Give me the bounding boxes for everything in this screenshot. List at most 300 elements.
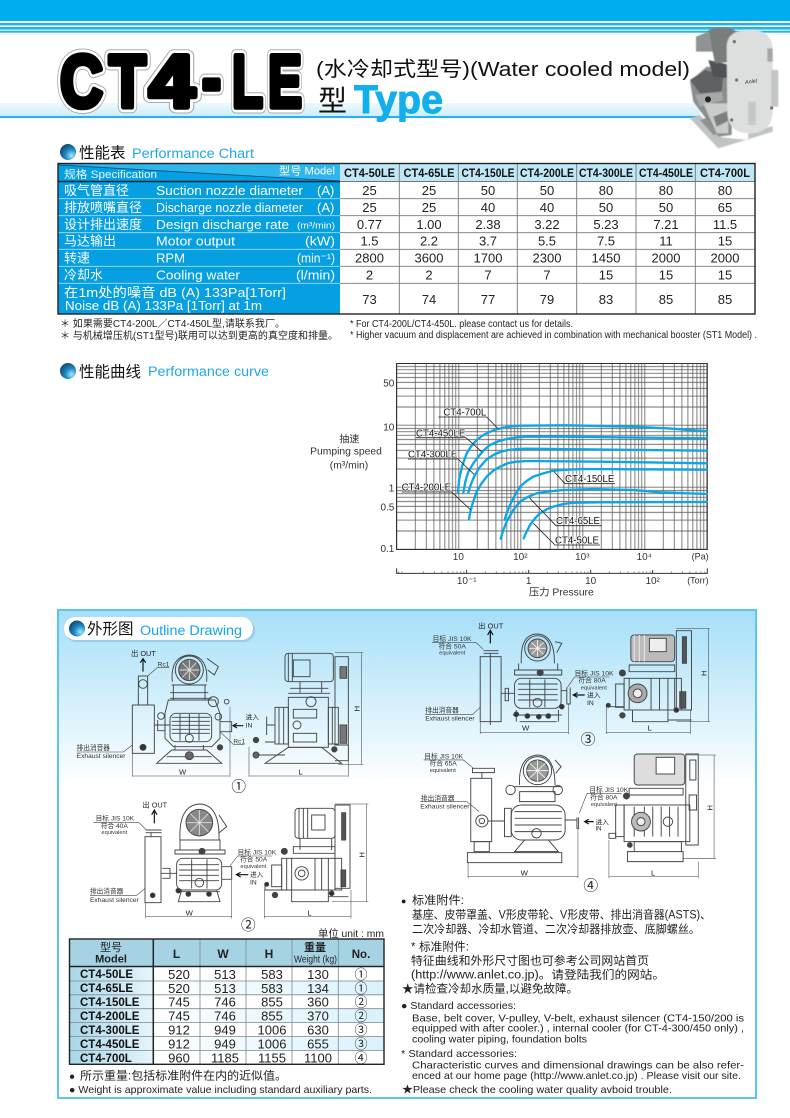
table values: 7 [543,267,551,282]
table grid [340,164,755,314]
table values: 2300 [533,250,561,265]
table header: W [217,947,229,961]
labels 1: H [352,706,361,711]
table values: 7 [484,267,492,282]
title: CT4-LE: E [268,40,302,123]
table rows: 855 [261,995,283,1010]
spec column: Design discharge rate [156,217,289,232]
table rows: CT4-50LE [80,969,133,981]
accessories notes: Chinese [401,893,711,996]
y axis labels: 50 [383,378,395,389]
title: CT4-LE: T [109,40,146,123]
heading: performance curve: Performance curve [148,364,269,379]
weight notes [69,1068,372,1096]
x axis: Torr: 10 [585,576,597,587]
labels 1: Rc1 [233,738,245,745]
labels 4: Exhaust silencer [420,804,470,811]
side view 3 [606,631,692,722]
table values: 2000 [711,250,739,265]
model header row: CT4-200LE [520,166,574,180]
table values: 15 [718,267,732,282]
table values: 73 [362,292,377,307]
x axis: Torr [397,568,709,598]
title: CT4-LE: E [268,40,302,123]
accessories notes: English: Characteristic curves and dimensional drawings can be also refer- [412,1060,744,1072]
model header row: CT4-450LE [639,166,693,180]
drawing 4 [420,752,716,894]
table rows: 1100 [304,1050,332,1065]
labels 2: 符合 50A [240,854,268,863]
table lines [70,939,384,1064]
table values: 3.22 [534,217,560,232]
spec column: 排放喷嘴直径 [64,200,142,215]
heading pill: outline drawing: 外形图 [87,620,134,638]
table rows: 630 [307,1022,329,1038]
heading: performance chart: 性能表 [79,144,126,162]
header stripes [0,0,790,118]
labels 3: L [648,724,653,733]
accessories notes: English: equipped with after cooler.) , internal cooler (for CT-4-300/450 only) , [412,1024,744,1035]
table rows: 520 [168,967,190,982]
table rows [80,967,368,1065]
spec column: (min⁻¹) [297,250,335,265]
labels 3: W [522,724,530,733]
spec column: Cooling water [156,267,241,282]
table rows: 1006 [258,1036,286,1051]
table header: L [173,947,180,961]
table rows: CT4-700L [80,1053,132,1065]
x axis labels: Pa: 10⁴ [637,552,652,563]
labels 4: W [521,868,529,877]
labels 2: Exhaust silencer [90,897,140,904]
labels 1: Rc1 [158,662,170,669]
accessories notes: English [401,1001,744,1096]
table values: 65 [718,200,732,215]
title: CT4-LE: T [109,40,146,123]
y axis labels: (m³/min) [330,460,368,471]
unit label: 单位 unit : mm [318,927,384,940]
y axis labels: 10 [383,422,395,433]
spec column: (A) [317,183,334,198]
x axis labels: Pa: 10 [453,552,464,563]
accessories notes: Chinese: 基座、皮带罩盖、V形皮带轮、V形皮带、排出消音器(ASTS)、 [412,908,711,922]
labels 2: W [186,908,194,917]
accessories notes: English: ★Please check the cooling water quality avboid trouble. [402,1085,672,1096]
spec column: RPM [156,250,185,265]
table values: 7.21 [653,217,679,232]
y axis labels: 抽速 [339,433,359,446]
dimension table [70,939,384,1065]
table values: 50 [599,200,613,215]
accessories notes: Chinese: 标准附件: [419,940,469,954]
spec column: Discharge nozzle diameter [156,200,304,215]
table values: 2800 [355,250,384,265]
spec column: 马达输出 [64,234,116,248]
labels 1: 进入 [246,714,259,722]
table values: 25 [362,183,377,198]
accessories notes: Chinese: ● [401,896,406,906]
arrows 2 [152,810,248,877]
model header row: CT4-300LE [579,166,633,180]
spec column: 转速 [64,250,90,265]
labels 2: H [357,852,366,858]
labels 3: Exhaust silencer [425,716,475,723]
table rows: 134 [307,981,329,996]
title: CT4-LE: - [202,37,221,120]
labels 4: H [706,805,715,811]
table rows: 360 [307,995,329,1010]
model header row: CT4-150LE [462,166,514,180]
table values: 85 [718,292,732,307]
spec column: 在1m处的噪音 dB (A) 133Pa[1Torr] [64,285,286,300]
title: CT4-LE: L [232,40,263,123]
labels 2: 目标 JIS 10K [238,847,277,856]
spec column: 冷却水 [64,267,103,282]
labels 2: 排出消音器 [90,887,124,896]
labels 4: equivalent [430,768,456,774]
curve labels: CT4-150LE [565,474,615,485]
title: CT4-LE [60,37,302,123]
table rows: 1185 [211,1050,239,1065]
accessories notes: English: * Standard accessories: [401,1049,517,1060]
heading: performance chart [60,144,254,162]
x axis: Torr: 10² [645,576,661,587]
title: CT4-LE: C [60,40,103,123]
curve labels: CT4-300LE [408,450,458,461]
labels 1: ① [231,779,246,796]
table values: 2000 [652,250,680,265]
table values: 15 [659,267,673,282]
table values [355,183,739,307]
heading: performance chart: Performance Chart [132,146,254,161]
table values: 79 [540,292,554,307]
title: CT4-LE: 4 [149,40,195,123]
table values: 77 [481,292,495,307]
accessories notes: Chinese: (http://www.anlet.co.jp)。请登陆我们的网站。 [411,968,665,982]
table values: 50 [540,183,554,198]
y axis labels [310,378,395,555]
table values: 80 [718,183,732,198]
table values: 2 [425,267,433,282]
curve labels: CT4-200LE [402,482,452,493]
table values: 25 [422,183,436,198]
labels 3: equivalent [581,685,607,691]
table rows: 949 [214,1022,236,1038]
labels 2: 目标 JIS 10K [96,814,135,823]
arrow 4 [585,819,594,824]
table values: 83 [599,292,613,307]
labels 2: equivalent [101,830,128,836]
side view 4 [609,754,698,862]
spec column: (A) [317,200,334,215]
table rows: 949 [214,1036,236,1051]
accessories notes: English: enced at our home page (http://www.anlet.co.jp) . Please visit our site. [412,1071,741,1082]
leaders 2 [90,823,272,895]
table rows: CT4-300LE [80,1025,140,1037]
drawing 2 [90,800,368,934]
heading: performance curve: 性能曲线 [79,363,141,381]
title: CT4-LE: - [202,37,221,120]
front view 1 [132,655,232,763]
labels 1: 排出消音器 [77,743,110,752]
table rows: 1155 [258,1050,286,1065]
x axis labels: Pa [453,551,709,563]
spec column [58,164,340,314]
table rows: ② [354,1009,368,1024]
table values: 1700 [474,250,502,265]
table values: 7.5 [597,234,615,249]
x axis labels: Pa: 10³ [575,552,590,563]
table footnotes: Chinese [60,317,338,342]
table footnotes: English: * For CT4-200L/CT4-450L. please contact us for details. [350,319,573,330]
model header row [340,164,755,182]
title: CT4-LE: L [232,40,263,123]
table rows: 583 [261,967,283,982]
table header: H [265,947,273,961]
table footnotes: English [350,319,757,341]
labels 3: 进入 [587,691,601,699]
curve labels: CT4-700L [443,408,487,419]
labels 4: equivalent [591,802,617,808]
table body background [70,967,384,1064]
table rows: CT4-200LE [80,1011,140,1023]
spec column: (l/min) [296,267,335,282]
subtitle: type: Type [354,78,443,122]
x axis labels: Pa: (Pa) [692,551,709,561]
table values: 40 [540,200,554,215]
labels 4: 进入 [595,818,609,826]
labels 1: W [179,767,187,776]
curve labels: CT4-65LE [556,516,601,527]
table values: 80 [599,183,613,198]
arrows 3 [488,630,585,697]
title: CT4-LE: L [232,40,263,123]
table footnotes: Chinese: ＊ 与机械增压机(ST1型号)联用可以达到更高的真空度和排量。 [60,329,338,342]
labels 2: 出 OUT [142,800,168,809]
y axis labels: Pumping speed [310,446,382,457]
model header row: CT4-50LE [344,166,395,180]
table values: 40 [481,200,495,215]
x axis labels: Pa: 10² [513,552,528,563]
x axis: Torr: 压力 Pressure [529,585,594,598]
table rows: 520 [168,981,190,996]
dimensions 2 [146,804,368,918]
table rows: ③ [354,1036,368,1051]
labels 4: 符合 65A [429,758,457,767]
table rows: CT4-65LE [80,983,133,995]
table rows: CT4-150LE [80,997,140,1009]
y axis labels: 1 [389,483,395,494]
labels 4: 符合 80A [590,792,618,801]
table rows: 130 [307,967,329,982]
chart grid [396,364,707,550]
y axis labels: 0.5 [380,503,395,514]
model header row: CT4-700L [700,166,750,180]
labels 3: 出 OUT [478,621,504,630]
heading: performance curve [60,363,269,381]
spec column: Suction nozzle diameter [156,183,304,198]
labels 2: 符合 40A [101,821,128,830]
table rows: 1006 [258,1022,286,1038]
table header: Weight (kg) [294,954,337,966]
title: CT4-LE: T [109,40,146,123]
labels 4: 目标 JIS 10K [424,752,464,761]
title: CT4-LE: - [202,37,221,120]
labels 3: 目标 JIS 10K [575,668,614,677]
table rows: 745 [168,995,190,1010]
accessories notes: Chinese: 标准附件: [412,893,464,907]
labels 2: 进入 [250,871,264,879]
labels 2: equivalent [240,864,267,870]
labels 4 [420,752,715,894]
title: CT4-LE: 4 [149,40,195,123]
table footnotes: Chinese: ＊ 如果需要CT4-200L／CT4-450L型,请联系我厂。 [60,317,285,330]
accessories notes: Chinese: 二次冷却器、冷却水管道、二次冷却器排放壶、底脚螺丝。 [412,922,700,936]
photo: pump: Anlet [744,78,758,86]
spec column: 规格 Specification [64,167,157,181]
front view 2 [145,804,232,903]
side view 1 [253,653,348,763]
table values: 50 [659,200,673,215]
labels 4: IN [595,826,602,832]
table rows: 513 [214,967,236,982]
weight notes: 所示重量:包括标准附件在内的近似值。 [80,1068,287,1082]
labels 4: 目标 JIS 10K [589,785,629,794]
dimensions 4 [468,755,716,878]
title: CT4-LE: C [60,40,103,123]
spec column: Noise dB (A) 133Pa [1Torr] at 1m [65,298,262,313]
chart: pumping speed versus pressure [310,364,709,598]
table rows: 746 [214,995,236,1010]
table rows: 912 [168,1036,190,1051]
table values: 5.5 [538,234,556,249]
table header: Model [95,954,127,966]
table rows: ② [354,995,368,1010]
arrows 1 [140,659,243,728]
dimensions 3 [480,628,710,734]
table rows: 855 [261,1009,283,1024]
table values: 3.7 [479,234,497,249]
labels 2: ② [241,917,256,934]
y axis labels: 0.1 [380,544,395,555]
table values: 1.00 [416,217,442,232]
table values: 15 [599,267,613,282]
leaders 1 [77,667,244,752]
accessories notes: Chinese: 特征曲线和外形尺寸图也可参考公司网站首页 [411,954,649,968]
table values: 2 [366,267,373,282]
table header [70,939,384,967]
table rows: ① [354,967,368,982]
labels 2 [90,800,366,934]
table rows: 745 [168,1009,190,1024]
table values: 0.77 [357,217,382,232]
table rows: ④ [354,1050,368,1065]
curve labels [402,408,615,546]
labels 1 [77,649,361,796]
dimensions 1 [132,653,363,777]
labels 4: ④ [583,877,598,894]
table values: 74 [422,292,436,307]
heading pill: outline drawing: Outline Drawing [140,623,242,638]
table values: 1.5 [360,234,379,249]
table rows: ③ [354,1022,368,1038]
curves [458,425,707,539]
model header row: CT4-65LE [404,166,454,180]
labels 1: 出 OUT [131,649,156,658]
table values: 85 [659,292,673,307]
table values: 1450 [592,250,620,265]
table values: 5.23 [593,217,619,232]
title: CT4-LE: C [60,40,103,123]
labels 4: 排出消音器 [421,793,455,802]
spec column: (m³/min) [297,220,335,232]
labels 1: IN [246,723,253,730]
title: CT4-LE: E [268,40,302,123]
photo: pump [690,28,778,148]
side view 2 [265,805,350,902]
labels 3: 符合 50A [439,642,466,651]
table values: 80 [659,183,673,198]
accessories notes: Chinese: ★请检查冷却水质量,以避免故障。 [402,982,578,996]
labels 2: IN [250,880,257,887]
weight notes: ● [69,1072,75,1082]
table header: 型号 [100,940,122,954]
table values: 11 [659,234,673,249]
performance table [58,164,755,314]
table rows: 912 [168,1022,190,1038]
table values: 11.5 [713,217,737,232]
table values: 25 [422,200,436,215]
accessories notes: English: Base, belt cover, V-pulley, V-belt, exhaust silencer (CT4-150/200 is [412,1014,744,1024]
table rows: CT4-450LE [80,1039,140,1051]
table rows: 655 [307,1036,329,1051]
x axis: Torr: 1 [526,576,532,587]
labels 1: Exhaust silencer [77,753,126,760]
spec column: Motor output [156,234,235,248]
heading pill: outline drawing [64,617,255,642]
labels 3: equivalent [439,651,466,657]
spec column: 型号 Model [279,164,335,178]
labels 3: H [700,670,709,676]
leaders 4 [420,760,622,813]
table rows: ① [354,981,368,996]
labels 3: IN [587,700,594,707]
accessories notes: English: ● Standard accessories: [401,1001,516,1012]
weight notes: ● Weight is approximate value including standard auxiliary parts. [69,1084,372,1096]
front view 4 [467,755,579,863]
curve labels: CT4-50LE [555,535,600,546]
leaders 3 [425,643,610,715]
labels 2: L [307,908,312,917]
panel: outline drawing [58,610,756,1098]
curve labels: CT4-450LE [416,428,466,439]
table header: 重量 [304,940,326,954]
labels 3: 符合 80A [578,676,606,685]
labels 3 [425,621,709,749]
labels 3: 目标 JIS 10K [433,634,472,643]
subtitle: water cooled model: (水冷却式型号)(Water cooled model) [316,58,690,81]
accessories notes: English: cooling water piping, foundation bolts [412,1034,587,1045]
spec column: 设计排出速度 [64,217,142,232]
accessories notes: Chinese: * [411,942,416,954]
spec column: (kW) [305,234,335,248]
subtitle: type: 型 [318,85,347,118]
table values: 2.2 [420,234,438,249]
table header: No. [352,949,370,961]
table rows: 370 [307,1009,329,1024]
table values: 25 [362,200,377,215]
spec column: 吸气管直径 [64,183,129,198]
